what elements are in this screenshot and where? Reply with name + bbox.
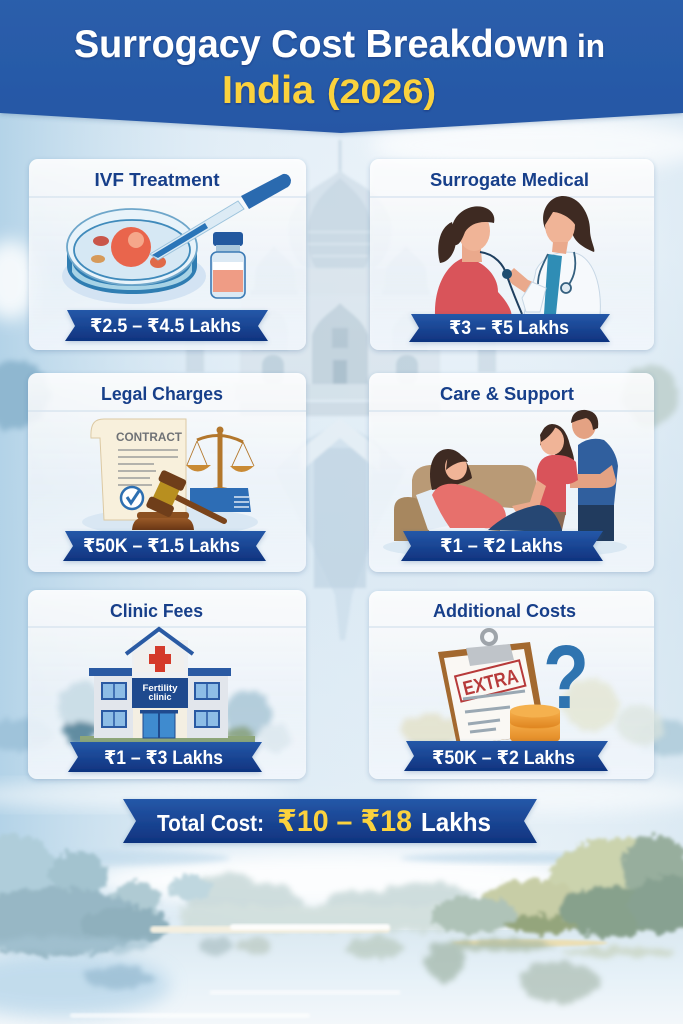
contract (91, 419, 186, 520)
total cost ribbon (123, 799, 537, 843)
price ribbon (63, 531, 266, 561)
price ribbon (404, 741, 608, 771)
title: (2026) (327, 73, 436, 111)
heading: care and support: Care & Support (440, 384, 574, 404)
icon: clipboard with extra stamp, question mark and coins (400, 628, 664, 746)
icon: contract, scales and gavel (82, 419, 258, 536)
icon: fertility clinic building (58, 629, 291, 752)
title: Surrogacy Cost Breakdown (74, 23, 569, 66)
panel: additional costs (369, 591, 664, 779)
left trees (0, 834, 210, 956)
price ribbon (65, 310, 268, 341)
panel: clinic fees (28, 590, 306, 779)
price ribbon (68, 742, 262, 772)
heading: IVF treatment: IVF Treatment (94, 170, 220, 190)
panel: IVF treatment (29, 159, 306, 350)
heading: surrogate medical: Surrogate Medical (430, 170, 589, 190)
icon: petri dish and pipette (62, 174, 291, 304)
water reflections (0, 937, 675, 1002)
patient (435, 206, 512, 318)
question mark: ? (543, 628, 589, 728)
taj mahal watermark (186, 140, 496, 640)
total cost ribbon: ₹10 – ₹18 (277, 805, 412, 838)
header banner (0, 0, 683, 133)
price ribbon: ₹2.5 – ₹4.5 Lakhs (90, 316, 241, 337)
price ribbon: ₹50K – ₹2 Lakhs (432, 748, 575, 769)
coins (510, 704, 560, 744)
lake and trees landscape (0, 834, 683, 1024)
heading: legal charges: Legal Charges (101, 384, 223, 404)
panel: care and support (369, 373, 654, 572)
sofa (394, 465, 536, 541)
standing woman (512, 424, 578, 530)
price ribbon (401, 531, 603, 561)
gavel (132, 469, 224, 530)
reclining woman (416, 449, 562, 532)
panel: surrogate medical (370, 159, 654, 350)
title (74, 23, 605, 112)
contract: CONTRACT (116, 430, 183, 444)
icon: vial (211, 232, 245, 298)
doctor (480, 196, 600, 316)
clinic sign: Fertility (142, 683, 178, 693)
panel: legal charges (28, 373, 306, 572)
price ribbon: ₹1 – ₹3 Lakhs (104, 748, 223, 769)
total cost ribbon: Total Cost: (157, 810, 264, 836)
heading: additional costs: Additional Costs (433, 601, 576, 621)
title: India (222, 69, 314, 112)
price ribbon: ₹1 – ₹2 Lakhs (440, 536, 563, 557)
man (570, 410, 618, 541)
title: in (577, 28, 605, 64)
price ribbon (409, 314, 610, 342)
icon: doctor checking pregnant patient (435, 196, 600, 318)
icon: fertility clinic building: clinic (148, 692, 172, 702)
icon: family care on sofa (383, 410, 627, 559)
price ribbon: ₹3 – ₹5 Lakhs (449, 318, 569, 339)
heading: clinic fees: Clinic Fees (110, 601, 203, 621)
total cost ribbon: Lakhs (421, 807, 491, 837)
price ribbon: ₹50K – ₹1.5 Lakhs (83, 536, 240, 557)
scales of justice (186, 426, 254, 512)
stamp text: EXTRA (461, 665, 521, 700)
far trees (180, 873, 500, 931)
right trees (431, 836, 683, 938)
